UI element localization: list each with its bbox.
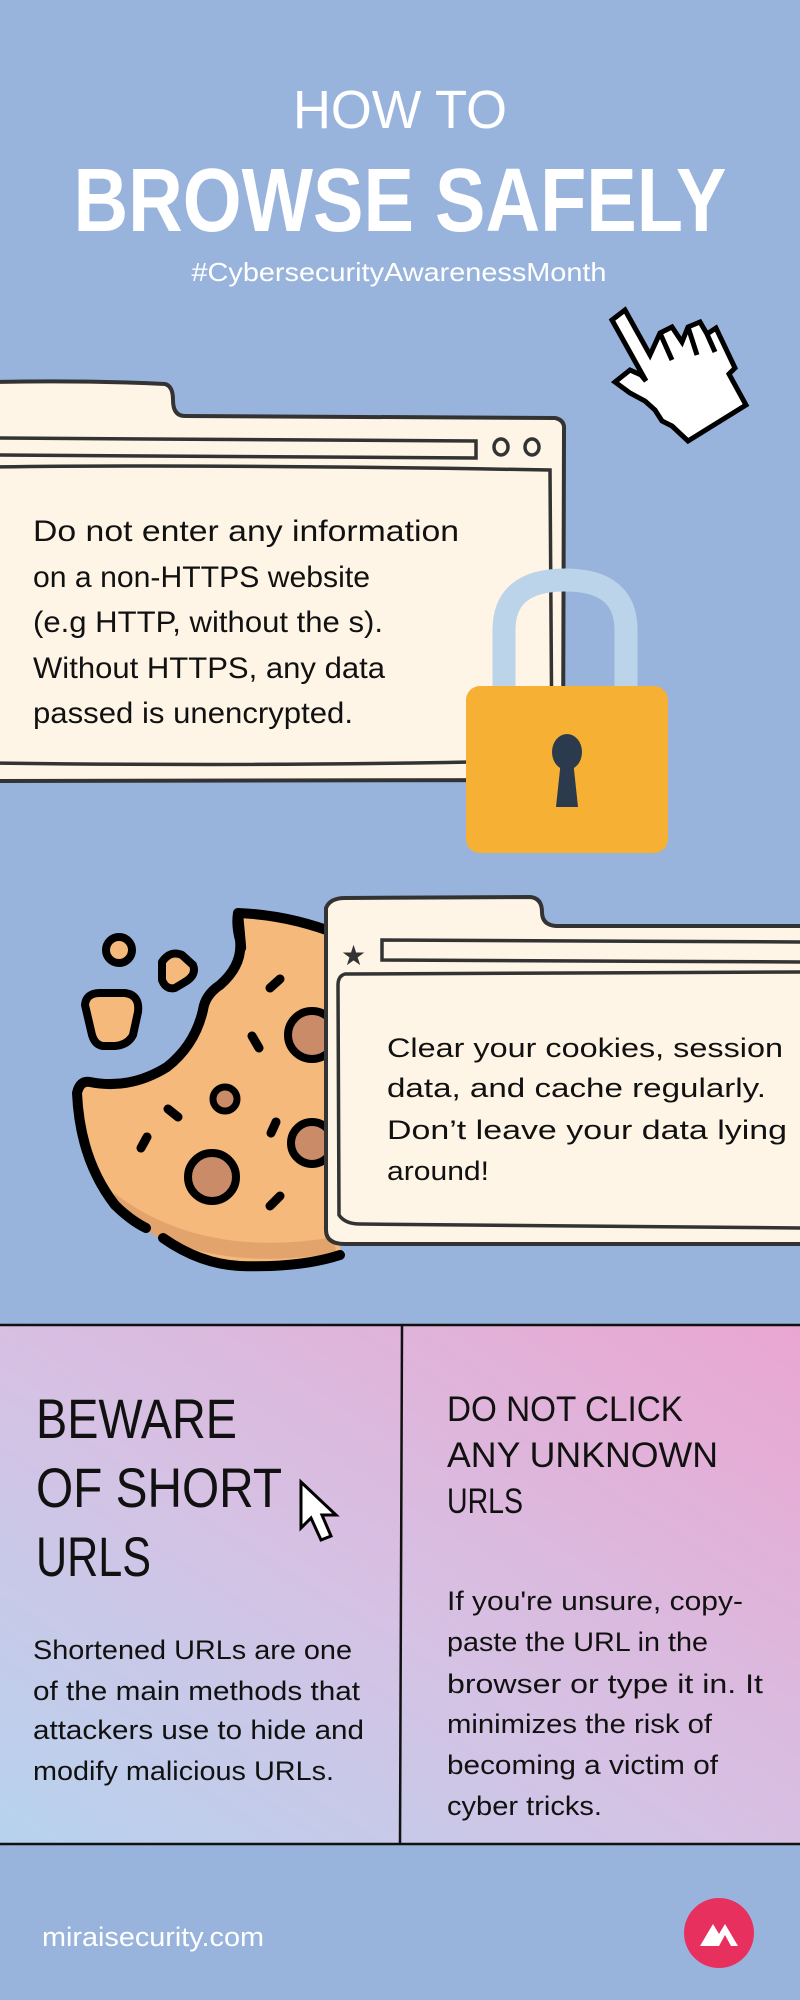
window buttons	[494, 439, 539, 455]
heading: do not click: URLS	[447, 1482, 523, 1521]
text: unknown urls: becoming a victim of	[447, 1750, 719, 1780]
text: cookies tip	[387, 1033, 787, 1186]
title	[74, 80, 726, 287]
text: short urls: attackers use to hide and	[33, 1715, 364, 1745]
text: HTTPS tip: on a non-HTTPS website	[33, 561, 370, 594]
panel: cookies browser window	[326, 897, 800, 1244]
title: #CybersecurityAwarenessMonth	[192, 257, 606, 287]
text: cookies tip: around!	[387, 1156, 489, 1186]
text: HTTPS tip: (e.g HTTP, without the s).	[33, 606, 383, 639]
text: unknown urls: paste the URL in the	[447, 1627, 708, 1657]
text: cookies tip: Clear your cookies, session	[387, 1033, 783, 1063]
heading: do not click	[447, 1390, 718, 1521]
text: unknown urls: minimizes the risk of	[447, 1709, 713, 1739]
heading: beware of short urls: BEWARE	[36, 1387, 237, 1450]
icon: star: ★	[341, 940, 366, 971]
heading: beware of short urls: OF SHORT	[36, 1456, 282, 1519]
icon: arrow cursor	[301, 1482, 336, 1540]
heading: do not click: DO NOT CLICK	[447, 1390, 683, 1429]
icon: pointing hand cursor	[612, 310, 746, 441]
text: short urls: Shortened URLs are one	[33, 1635, 352, 1665]
title: HOW TO	[293, 80, 507, 140]
text: unknown urls: If you're unsure, copy-	[447, 1586, 743, 1616]
text: unknown urls	[447, 1586, 764, 1821]
text: unknown urls: browser or type it in. It	[447, 1669, 764, 1699]
heading: do not click: ANY UNKNOWN	[447, 1436, 718, 1475]
text: short urls	[33, 1635, 364, 1786]
footer url: miraisecurity.com	[42, 1922, 264, 1952]
text: HTTPS tip: Without HTTPS, any data	[33, 652, 385, 685]
panel: HTTPS browser window	[0, 381, 564, 781]
heading: beware of short urls: URLS	[36, 1525, 151, 1588]
icon: padlock	[466, 580, 668, 853]
text: unknown urls: cyber tricks.	[447, 1791, 602, 1821]
text: HTTPS tip: Do not enter any information	[33, 515, 459, 548]
icon: logo	[684, 1898, 754, 1968]
text: short urls: of the main methods that	[33, 1676, 361, 1706]
address bar	[0, 438, 476, 458]
text: HTTPS tip: passed is unencrypted.	[33, 697, 353, 730]
panel: bottom tips band	[0, 1325, 800, 1844]
text: cookies tip: Don’t leave your data lying	[387, 1115, 787, 1145]
heading: beware of short urls	[36, 1387, 282, 1588]
text: cookies tip: data, and cache regularly.	[387, 1073, 766, 1103]
icon: bitten cookie	[77, 913, 340, 1266]
text: short urls: modify malicious URLs.	[33, 1756, 334, 1786]
crumbs	[85, 937, 194, 1046]
text: HTTPS tip	[33, 515, 459, 730]
